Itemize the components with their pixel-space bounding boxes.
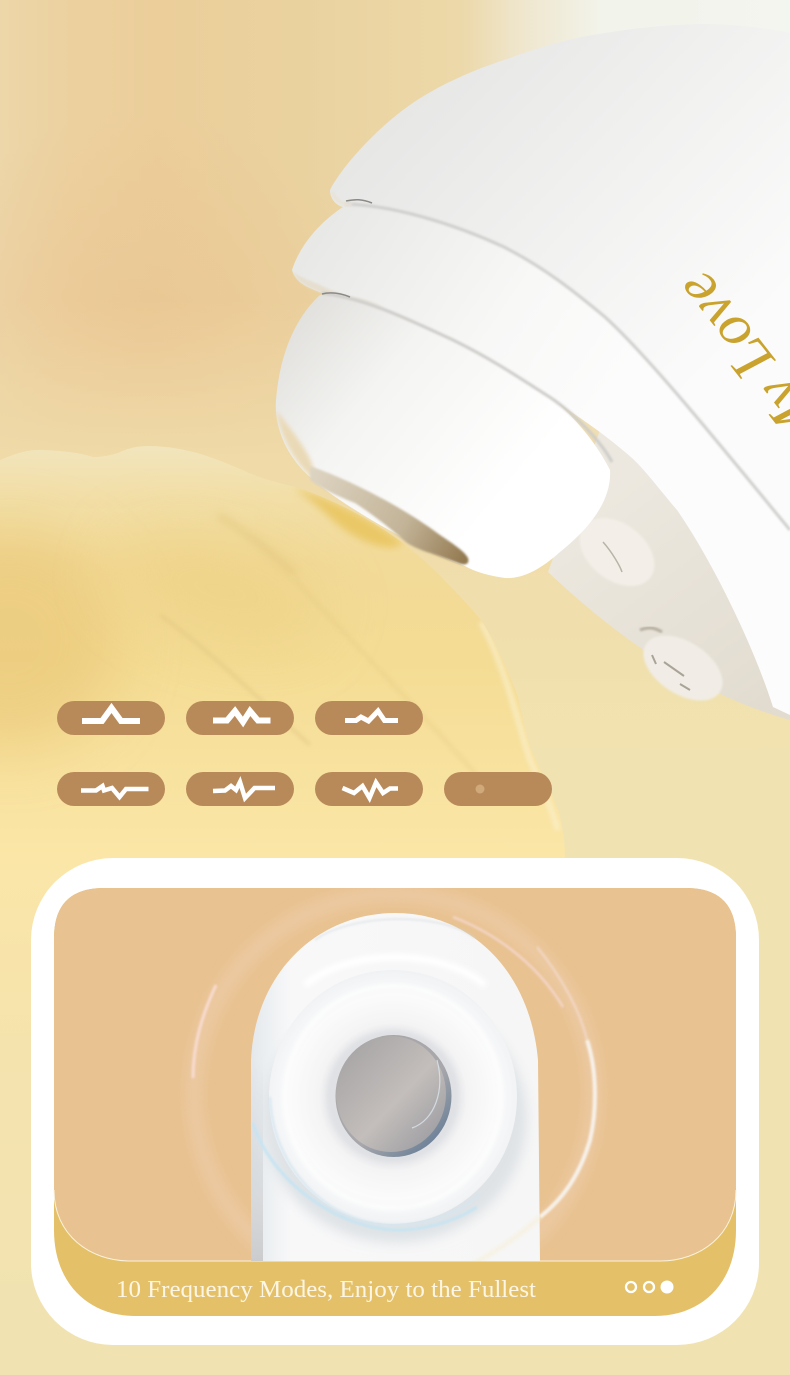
tip groove	[322, 293, 612, 462]
mode pill 3	[315, 701, 423, 735]
device: massage head	[276, 24, 790, 720]
mode pill 7	[444, 772, 552, 806]
mode indicators	[57, 701, 552, 806]
device tip	[276, 294, 610, 578]
warm tint on tip base	[276, 410, 314, 478]
mode pill 4	[57, 772, 165, 806]
device body	[251, 913, 540, 1262]
card white frame	[31, 858, 759, 1345]
device close-up	[193, 894, 595, 1294]
device underside with buttons	[548, 430, 790, 720]
panel: frequency modes card	[31, 858, 759, 1345]
device dome	[330, 24, 790, 540]
mode pill 5	[186, 772, 294, 806]
pagination dots	[626, 1280, 674, 1294]
device band	[292, 207, 790, 715]
vibration rings	[193, 894, 595, 1294]
mode pill 6	[315, 772, 423, 806]
caption: 10 Frequency Modes, Enjoy to the Fullest	[116, 1277, 536, 1303]
contact shadow	[310, 466, 468, 564]
card peach area	[54, 888, 736, 1261]
shadow under donut	[266, 1052, 529, 1246]
band lower lip	[293, 272, 385, 308]
mode pill 2	[186, 701, 294, 735]
suction hole	[328, 1031, 458, 1161]
yellow body shape	[0, 446, 565, 918]
band groove	[345, 204, 790, 530]
mode pill 1	[57, 701, 165, 735]
darker contact area under tip	[292, 487, 403, 547]
card gold base	[54, 888, 736, 1316]
swirl highlight	[474, 1216, 542, 1261]
silicone donut	[269, 970, 517, 1224]
peach area outline	[54, 1190, 736, 1261]
outer glow rings	[250, 1123, 478, 1232]
